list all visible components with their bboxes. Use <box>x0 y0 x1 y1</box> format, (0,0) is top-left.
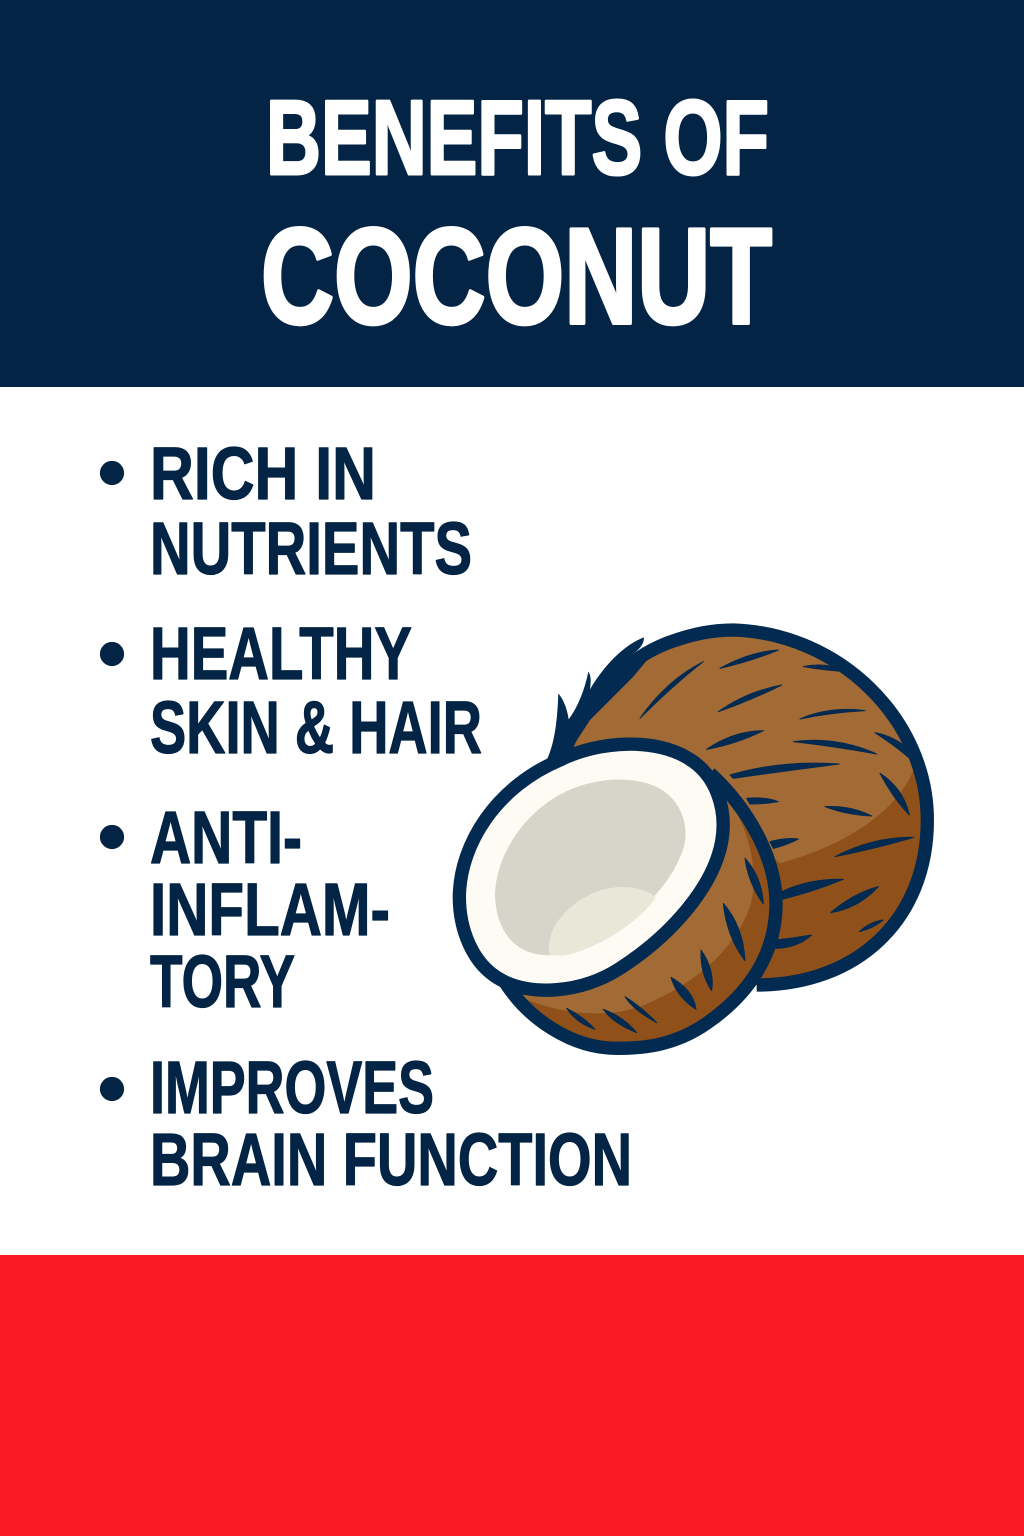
benefit: rich in nutrients <box>100 432 472 590</box>
shell fibre marks <box>567 858 763 1033</box>
inner cavity <box>495 779 686 955</box>
benefit: anti-inflammatory: ANTI- <box>150 796 302 879</box>
benefit: anti-inflammatory: INFLAM- <box>150 868 390 951</box>
shaded underside <box>753 767 927 985</box>
husk outline <box>565 630 927 985</box>
benefit: healthy skin and hair <box>100 612 482 769</box>
benefit: improves brain function <box>100 1046 632 1201</box>
benefit: healthy skin and hair: SKIN & HAIR <box>150 686 482 769</box>
benefit: improves brain function: BRAIN FUNCTION <box>150 1118 632 1201</box>
husk body <box>565 630 927 985</box>
benefit: rich in nutrients: RICH IN <box>150 432 376 515</box>
title line 2: COCONUT <box>261 200 772 352</box>
husk fibre marks <box>640 650 914 948</box>
benefit: healthy skin and hair: HEALTHY <box>150 612 412 695</box>
title line 1: BENEFITS OF <box>266 79 769 197</box>
benefit: anti-inflammatory: TORY <box>150 940 295 1023</box>
icon: coconut illustration <box>459 630 927 1048</box>
shell outline <box>502 773 776 1048</box>
panel: navy header <box>0 0 1024 387</box>
husk hair tufts <box>546 637 657 762</box>
panel: benefits list <box>100 432 632 1201</box>
whole coconut <box>546 630 927 985</box>
shell <box>502 773 776 1048</box>
panel: red footer <box>0 1255 1024 1536</box>
benefit: improves brain function: IMPROVES <box>150 1046 434 1129</box>
benefit: anti-inflammatory <box>100 796 390 1023</box>
halved coconut <box>459 744 776 1048</box>
shell highlight <box>503 797 754 1013</box>
benefit: rich in nutrients: NUTRIENTS <box>150 507 472 590</box>
cavity highlight <box>549 887 656 955</box>
white flesh <box>459 744 723 990</box>
